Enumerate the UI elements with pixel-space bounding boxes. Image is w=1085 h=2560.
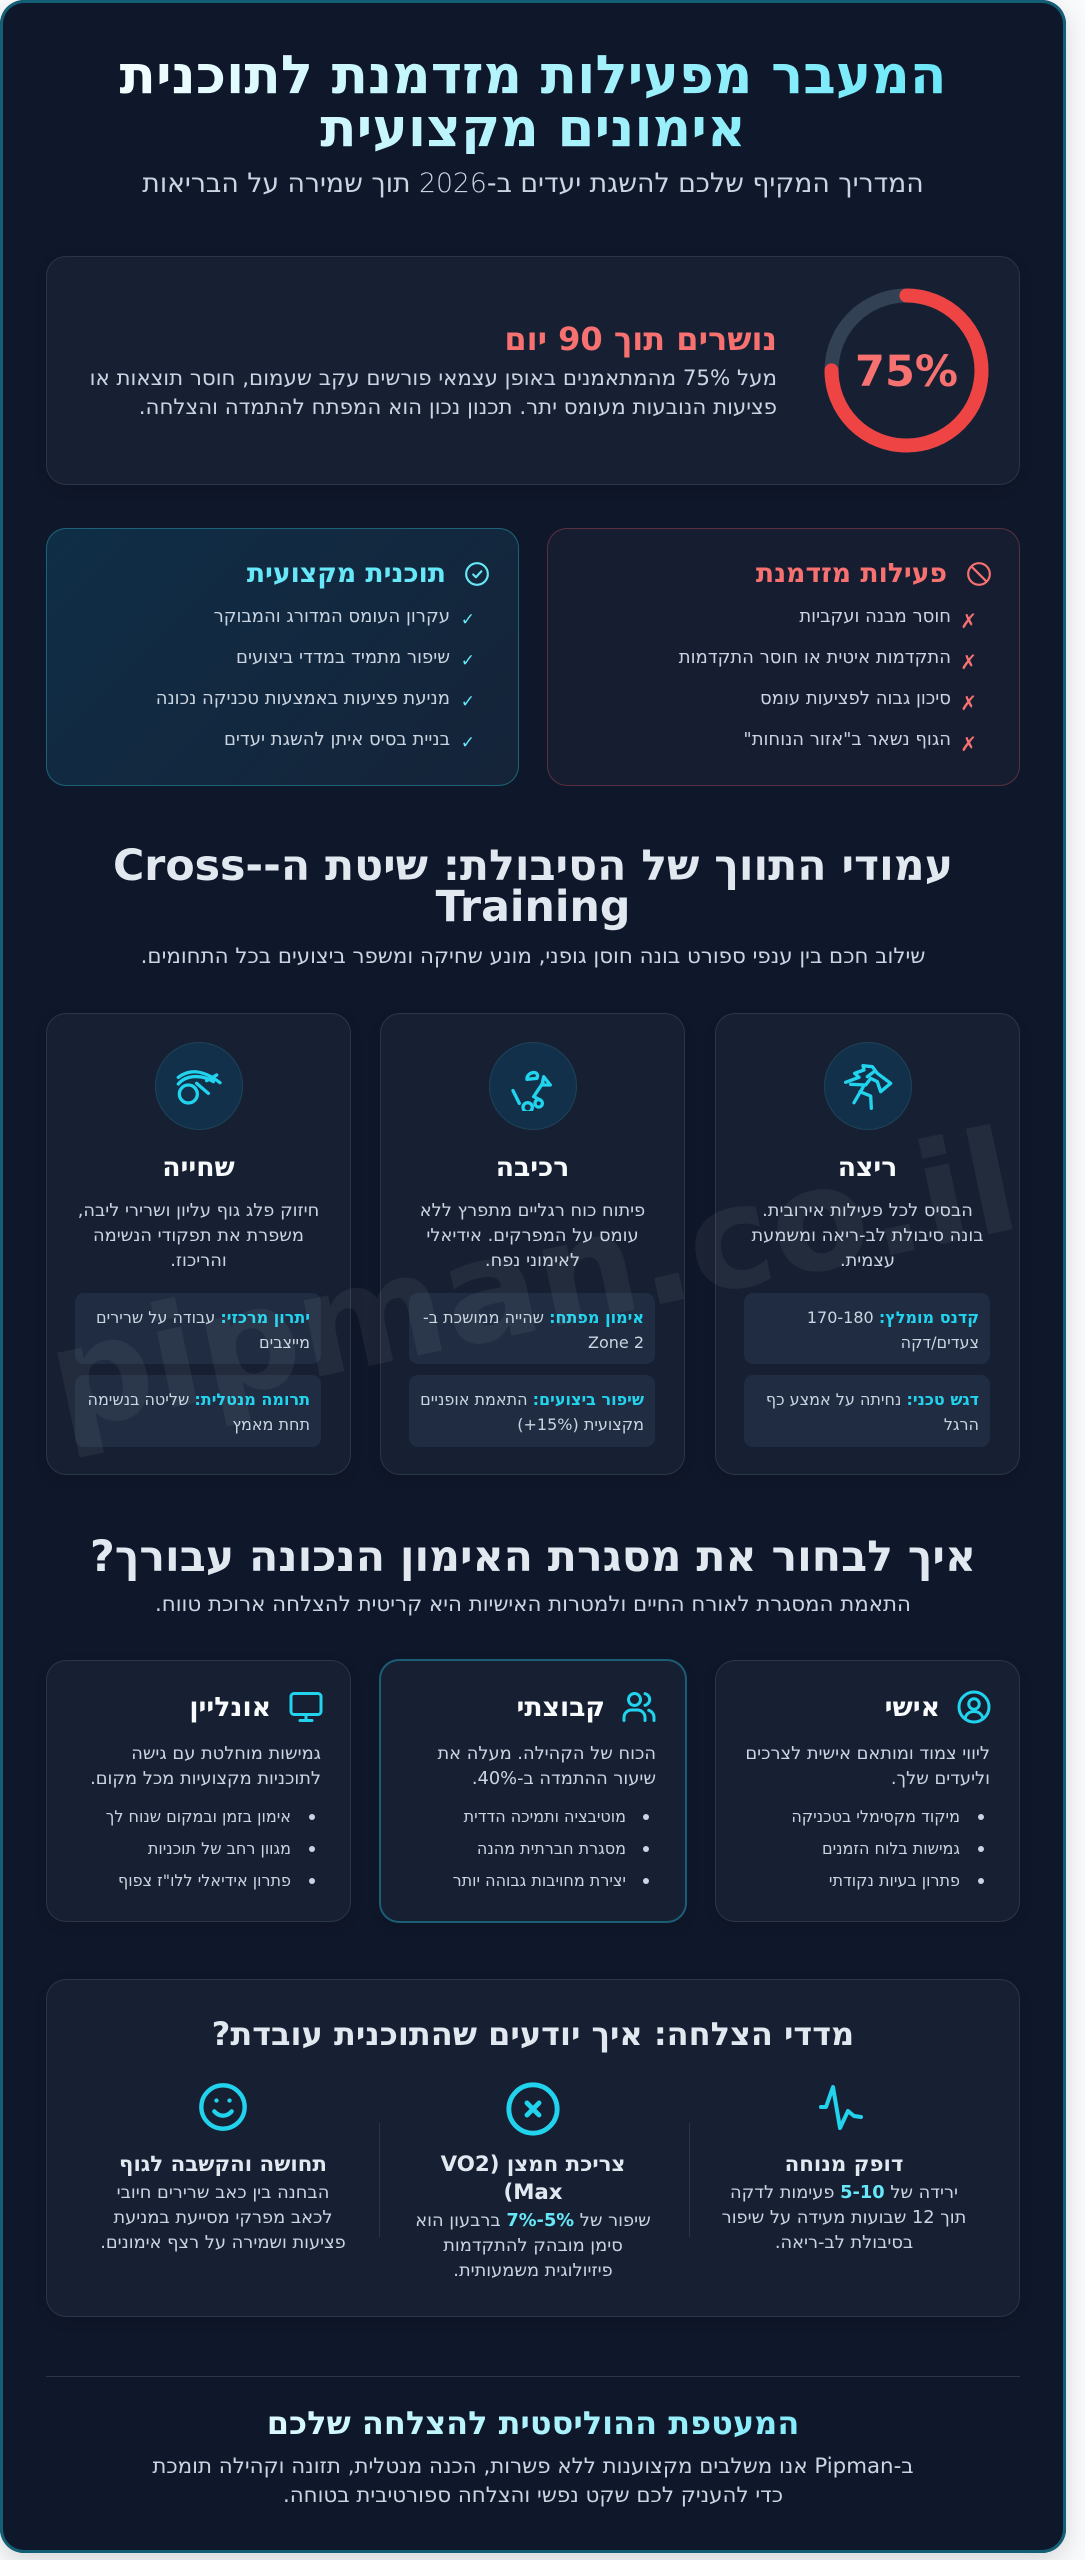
- card text: הכוח של הקהילה. מעלה את: [438, 1742, 656, 1764]
- stat: cadence: צעדים/דקה: [901, 1332, 979, 1352]
- metric text: body feeling: פציעות ושמירה על רצף אימונים.: [100, 2232, 346, 2252]
- icon: ban: [967, 562, 991, 586]
- stat: performance: שיפור ביצועים: התאמת אופניים: [420, 1390, 644, 1408]
- panel: professional plan: [46, 528, 519, 786]
- card text: לאימוני נפח.: [485, 1250, 580, 1270]
- list of drawbacks: ✗: [960, 691, 977, 715]
- stat: cadence: קדנס מומלץ: 170-180: [807, 1308, 979, 1326]
- metric text: resting pulse: בסיבולת לב-ריאה.: [775, 2232, 913, 2252]
- card heading: קבוצתי: [516, 1692, 605, 1723]
- panel: casual activity: [547, 528, 1020, 786]
- metric heading: VO2 max: [440, 2152, 625, 2205]
- donut chart: 75%: [824, 288, 988, 452]
- footer heading: [46, 2401, 1020, 2445]
- metric heading: body feeling: תחושה והקשבה לגוף: [119, 2152, 327, 2177]
- metric text: resting pulse: [722, 2182, 966, 2252]
- card: personal: [715, 1660, 1020, 1922]
- metric heading: resting pulse: דופק מנוחה: [785, 2152, 903, 2177]
- card text: [78, 1200, 319, 1270]
- card heading: רכיבה: [496, 1152, 569, 1183]
- list of drawbacks: סיכון גבוה לפציעות עומס: [760, 688, 951, 709]
- card text: חיזוק פלג גוף עליון ושרירי ליבה,: [78, 1200, 319, 1220]
- divider: [46, 2376, 1020, 2377]
- panel heading: פעילות מזדמנת: [756, 558, 947, 589]
- footer text: כדי להעניק לכם שקט נפשי והצלחה ספורטיבית בטוחה.: [283, 2482, 783, 2508]
- stat: technique: [744, 1375, 990, 1447]
- card text: וליעדים שלך.: [891, 1768, 990, 1788]
- watermark: pipman.co.il: [35, 1099, 1031, 1464]
- panel heading: מדדי הצלחה: איך יודעים שהתוכנית עובדת?: [212, 2015, 854, 2053]
- stat description: פציעות הנובעות מעומס יתר. תכנון נכון הוא המפתח להתמדה והצלחה.: [139, 394, 777, 420]
- footer text: ב-Pipman אנו משלבים מקצוענות ללא פשרות, הכנה מנטלית, תזונה וקהילה תומכת: [152, 2454, 914, 2478]
- title: אימונים מקצועית: [320, 96, 746, 159]
- section subtitle: התאמת המסגרת לאורח החיים ולמטרות האישיות היא קריטית להצלחה ארוכת טווח.: [155, 1592, 911, 1617]
- metric text: resting pulse: ירידה של 5-10 פעימות לדקה: [730, 2182, 958, 2202]
- stat: main advantage: מייצבים: [259, 1332, 310, 1352]
- stat: mental contribution: תרומה מנטלית: שליטה בנשימה: [87, 1390, 310, 1408]
- subtitle: המדריך המקיף שלכם להשגת יעדים ב-2026 תוך שמירה על הבריאות: [142, 168, 924, 199]
- list of drawbacks: ✗: [960, 609, 977, 633]
- stat: key workout: Zone 2: [588, 1332, 644, 1352]
- metric text: resting pulse: תוך 12 שבועות מעידה על שיפור: [722, 2206, 966, 2228]
- list of drawbacks: [678, 606, 977, 756]
- list of benefits: ✓: [461, 733, 475, 753]
- stat: mental contribution: [75, 1375, 321, 1447]
- stat: mental contribution: תחת מאמץ: [232, 1414, 310, 1434]
- icon: check circle: [465, 562, 489, 586]
- title: המעבר מפעילות מזדמנת לתוכנית: [120, 43, 946, 106]
- section heading: cross-training: עמודי התווך של הסיבולת: שיטת ה--Cross: [113, 841, 953, 891]
- icon: users: [622, 1692, 656, 1722]
- feature list: אימון בזמן ובמקום שנוח לך: [106, 1807, 291, 1826]
- card heading: שחייה: [162, 1152, 235, 1183]
- panel heading: תוכנית מקצועית: [247, 558, 446, 589]
- stat: cadence: [744, 1293, 990, 1364]
- icon: x circle: [506, 2082, 560, 2136]
- icon: pulse: [819, 2085, 863, 2130]
- card text: פיתוח כוח רגליים מתפרץ ללא: [420, 1200, 645, 1220]
- card: cycling: [380, 1013, 685, 1475]
- stat: technique: הרגל: [944, 1414, 979, 1434]
- card text: עומס על המפרקים. אידיאלי: [426, 1224, 639, 1246]
- metric text: body feeling: הבחנה בין כאב שרירים חיובי: [117, 2182, 329, 2202]
- feature list: [791, 1807, 984, 1890]
- card text: [745, 1742, 990, 1788]
- divider: [379, 2123, 380, 2237]
- section heading: cross-training: Training: [436, 882, 630, 932]
- card text: [90, 1742, 321, 1788]
- metric text: VO2 max: סימן מובהק להתקדמות: [443, 2234, 623, 2256]
- feature list: פתרון בעיות נקודתי: [829, 1871, 960, 1890]
- stat description: [90, 366, 777, 420]
- card text: [420, 1200, 645, 1270]
- card text: [752, 1200, 983, 1270]
- feature list: מגוון רחב של תוכניות: [148, 1839, 291, 1858]
- card heading: אונליין: [189, 1692, 271, 1723]
- list of drawbacks: ✗: [960, 650, 977, 674]
- stat: key workout: אימון מפתח: שהייה ממושכת ב-: [423, 1308, 644, 1326]
- list of benefits: שיפור מתמיד במדדי ביצועים: [236, 647, 450, 668]
- card text: שיעור ההתמדה ב-40%.: [472, 1768, 656, 1788]
- divider: [689, 2123, 690, 2237]
- icon: monitor: [290, 1692, 322, 1722]
- card text: משפרת את תפקודי הנשימה: [93, 1224, 304, 1246]
- card heading: ריצה: [838, 1152, 897, 1183]
- card: swimming: [46, 1013, 351, 1475]
- list of benefits: מניעת פציעות באמצעות טכניקה נכונה: [156, 688, 450, 709]
- card: online: [46, 1660, 351, 1922]
- list of benefits: ✓: [461, 651, 475, 671]
- section heading: cross-training: [113, 841, 953, 932]
- section subtitle: שילוב חכם בין ענפי ספורט בונה חוסן גופני, מונע שחיקה ומשפר ביצועים בכל התחומים.: [141, 944, 925, 969]
- card text: והריכוז.: [170, 1250, 227, 1270]
- metric text: VO2 max: שיפור של 5%-7% ברבעון הוא: [415, 2210, 651, 2230]
- list of drawbacks: הגוף נשאר ב"אזור הנוחות": [743, 729, 951, 750]
- panel: success metrics: [46, 1979, 1020, 2317]
- card heading: אישי: [885, 1692, 940, 1723]
- card text: הבסיס לכל פעילות אירובית.: [762, 1200, 973, 1220]
- list of benefits: [156, 606, 475, 753]
- icon: cycling: [488, 1042, 576, 1130]
- metric heading: VO2 max: צריכת חמצן (VO2: [441, 2152, 625, 2177]
- feature list: מוטיבציה ותמיכה הדדית: [464, 1807, 626, 1826]
- stat: performance: מקצועית (15%+): [517, 1414, 644, 1434]
- metric text: body feeling: לכאב מפרקי מסייעת במניעת: [113, 2206, 333, 2228]
- icon: smile: [199, 2083, 247, 2131]
- icon: user circle: [958, 1690, 990, 1724]
- donut chart: 75%: 75%: [855, 347, 958, 397]
- list of drawbacks: חוסר מבנה ועקביות: [799, 606, 951, 627]
- metric text: VO2 max: פיזיולוגית משמעותית.: [453, 2260, 613, 2280]
- card text: גמישות מוחלטת עם גישה: [131, 1742, 321, 1764]
- feature list: מיקוד מקסימלי בטכניקה: [791, 1807, 960, 1826]
- stat: key workout: [409, 1293, 655, 1364]
- stat description: מעל 75% מהמתאמנים באופן עצמאי פורשים עקב שעמום, חוסר תוצאות או: [90, 366, 777, 390]
- card text: [438, 1742, 656, 1788]
- stat: technique: דגש טכני: נחיתה על אמצע כף: [766, 1390, 979, 1408]
- metric text: body feeling: [100, 2182, 346, 2252]
- icon: running: [824, 1042, 912, 1130]
- feature list: [453, 1807, 649, 1890]
- feature list: פתרון אידיאלי ללו"ז צפוף: [118, 1871, 291, 1890]
- stat: main advantage: יתרון מרכזי: עבודה על שרירים: [96, 1308, 310, 1326]
- list of benefits: בניית בסיס איתן להשגת יעדים: [224, 729, 450, 750]
- icon: swimming: [154, 1042, 242, 1130]
- card: running: [715, 1013, 1020, 1475]
- card: group (highlighted): [379, 1659, 687, 1923]
- card text: עצמית.: [840, 1250, 895, 1270]
- list of benefits: ✓: [461, 610, 475, 630]
- list of benefits: ✓: [461, 692, 475, 712]
- feature list: גמישות בלוח הזמנים: [822, 1839, 960, 1858]
- feature list: יצירת מחויבות גבוהה יותר: [453, 1871, 626, 1890]
- section heading: choosing a framework: איך לבחור את מסגרת האימון הנכונה עבורך?: [90, 1532, 976, 1582]
- footer heading: המעטפת ההוליסטית להצלחה שלכם: [267, 2404, 799, 2442]
- card text: ליווי צמוד ומותאם אישית לצרכים: [745, 1742, 990, 1764]
- panel: 75% dropout statistic: [46, 256, 1020, 485]
- list of benefits: עקרון העומס המדורג והמבוקר: [214, 606, 450, 627]
- card text: בונה סיבולת לב-ריאה ומשמעת: [752, 1224, 983, 1246]
- stat: performance: [409, 1375, 655, 1447]
- stat heading: נושרים תוך 90 יום: [504, 320, 777, 358]
- card text: לתוכניות מקצועיות מכל מקום.: [90, 1768, 321, 1788]
- footer text: [152, 2454, 914, 2508]
- stat: main advantage: [75, 1293, 321, 1364]
- metric heading: VO2 max: Max): [503, 2180, 563, 2205]
- title: [46, 48, 1020, 154]
- list of drawbacks: ✗: [960, 732, 977, 756]
- metric text: VO2 max: [415, 2210, 651, 2280]
- list of drawbacks: התקדמות איטית או חוסר התקדמות: [679, 647, 951, 668]
- feature list: [106, 1807, 315, 1890]
- feature list: מסגרת חברתית מהנה: [477, 1839, 626, 1858]
